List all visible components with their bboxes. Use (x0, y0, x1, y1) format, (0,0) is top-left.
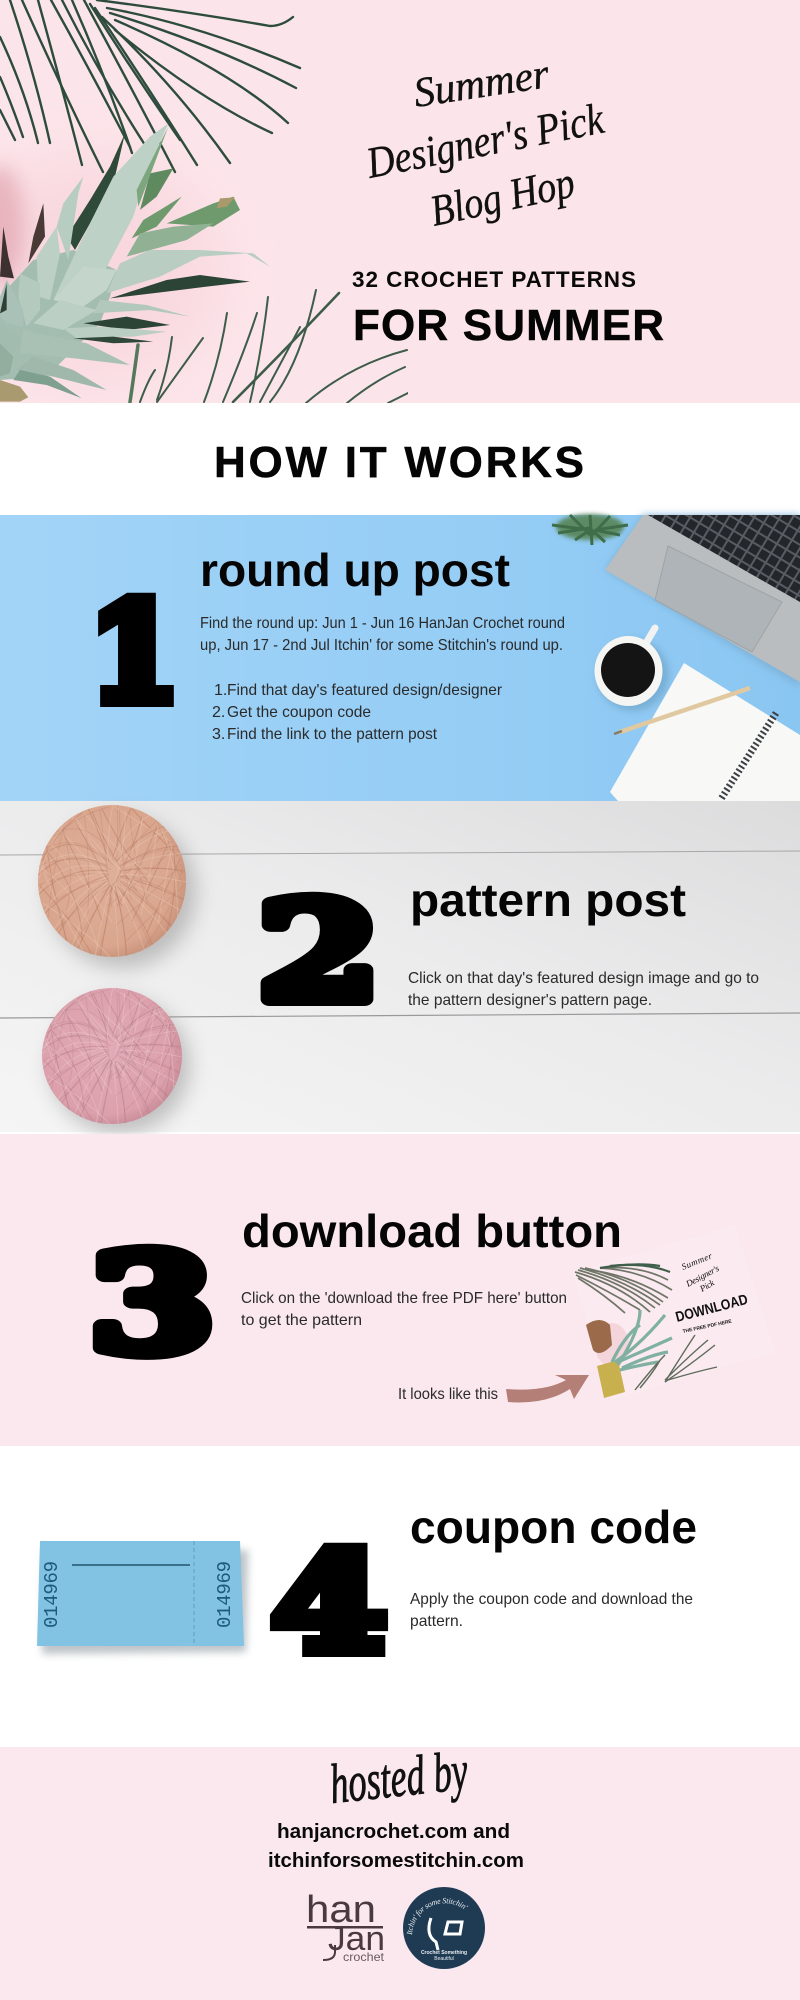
label: the free pdf here: THE FREE PDF HERE (682, 1319, 733, 1335)
text: host websites (268, 1820, 524, 1872)
illustration: plant (552, 514, 628, 545)
panel: step 4 coupon code (37, 1501, 697, 1682)
panel: step 2 pattern post (0, 783, 800, 1144)
body text: round up intro (200, 615, 565, 654)
title: script lines: Blog Hop (426, 157, 579, 236)
caption: it looks like this: It looks like this (398, 1386, 498, 1403)
illustration: ticket: 014969 (41, 1561, 63, 1628)
list: round up steps: 3. (212, 726, 225, 743)
label: mini script title: Pick (697, 1277, 717, 1294)
label: mini script title: Summer (680, 1250, 714, 1272)
illustration: pineapple crown (0, 123, 270, 402)
list: round up steps: 2. (212, 704, 225, 721)
illustration: peach yarn ball (38, 805, 205, 978)
logo: itchin for some stitchin badge: Crochet Something (421, 1950, 467, 1956)
text: host websites: itchinforsomestitchin.com (268, 1849, 524, 1872)
logo: itchin for some stitchin badge (403, 1887, 485, 1969)
body text: coupon: pattern. (410, 1613, 463, 1630)
list: round up steps: Find the link to the pattern post (227, 726, 438, 743)
panel: step 1 round up post (0, 514, 800, 801)
illustration: pink yarn ball (40, 988, 200, 1134)
text: host websites: hanjancrochet.com and (277, 1820, 510, 1843)
numeral 1: 1 (89, 574, 180, 732)
heading: round up post: round up post (200, 544, 510, 596)
panel: hero banner (0, 0, 800, 403)
illustration: palm fronds (0, 0, 300, 172)
logo: hanjan crochet: crochet (343, 1950, 385, 1964)
body text: round up intro: up, Jun 17 - 2nd Jul Itchin' for some Stitchin's round up. (200, 637, 563, 654)
title: script lines: Designer's Pick (362, 94, 609, 188)
heading: download button: download button (242, 1205, 622, 1257)
body text: pattern post (408, 970, 759, 1009)
list: round up steps: 1. (214, 682, 227, 699)
panel: step 3 download button (0, 1134, 800, 1446)
label: download: DOWNLOAD (674, 1292, 750, 1326)
heading: how it works: HOW IT WORKS (214, 438, 584, 487)
body text: pattern post: Click on that day's featured design image and go to (408, 970, 759, 987)
heading: hosted by: hosted by (327, 1740, 471, 1816)
title: script lines (362, 51, 609, 236)
title: script lines: Summer (411, 51, 553, 117)
logo: itchin for some stitchin badge: Itchin' for some Stitchin' (406, 1898, 468, 1935)
body text: pattern post: the pattern designer's pattern page. (408, 992, 652, 1009)
logo: itchin for some stitchin badge: Beautiful (434, 1956, 454, 1962)
logo: hanjan crochet: Jan (328, 1920, 385, 1958)
logo: hanjan crochet (306, 1889, 385, 1964)
label: mini script title: Designer's (683, 1263, 721, 1289)
body text: round up intro: Find the round up: Jun 1 - Jun 16 HanJan Crochet round (200, 615, 565, 632)
list: round up steps: Get the coupon code (227, 704, 371, 721)
body text: download: to get the pattern (241, 1312, 362, 1329)
numeral 4: 4 (272, 1524, 386, 1682)
label: mini script title (680, 1250, 721, 1294)
illustration: lower grass fronds (130, 290, 408, 403)
heading: coupon code: coupon code (410, 1501, 697, 1553)
illustration: coffee cup (594, 628, 669, 711)
list: round up steps (212, 682, 503, 743)
body text: download: Click on the 'download the free PDF here' button (241, 1290, 567, 1307)
body text: coupon (410, 1591, 693, 1630)
logo: hanjan crochet: han (306, 1889, 376, 1931)
thumbnail: download button preview (572, 1225, 775, 1400)
list: round up steps: Find that day's featured design/designer (227, 682, 503, 699)
panel: footer hosted by (0, 1740, 800, 2000)
illustration: laptop (605, 515, 800, 687)
title: for summer: FOR SUMMER (353, 301, 664, 350)
illustration: ticket: 014969 (214, 1561, 236, 1628)
subtitle: 32 CROCHET PATTERNS (352, 267, 636, 292)
body text: coupon: Apply the coupon code and download the (410, 1591, 693, 1608)
numeral 3: 3 (90, 1225, 214, 1383)
illustration: notebook and pencil (610, 663, 800, 801)
body text: download (241, 1290, 567, 1329)
numeral 2: 2 (258, 872, 380, 1031)
arrow (506, 1375, 589, 1402)
illustration: ticket (37, 1541, 248, 1654)
heading: pattern post: pattern post (410, 874, 686, 926)
